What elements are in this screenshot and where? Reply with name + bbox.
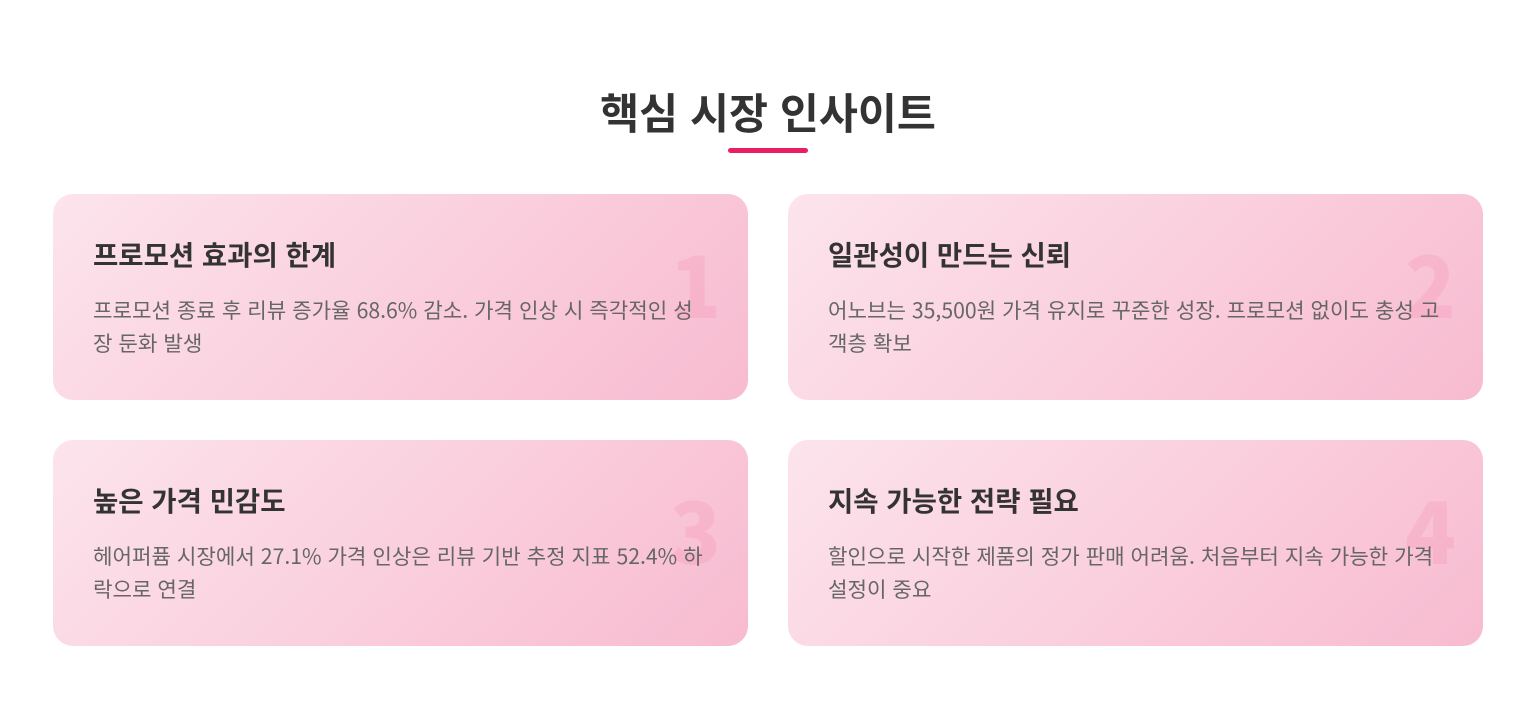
- number 1: 1: [670, 222, 721, 343]
- heading: 지속 가능한 전략 필요: [828, 479, 1079, 519]
- panel: insight 4: [788, 440, 1483, 646]
- number 4: 4: [1405, 468, 1456, 589]
- text block: 할인으로 시작한 제품의 정가 판매 어려움. 처음부터 지속 가능한 가격 설정이 중요: [828, 540, 1433, 604]
- heading: 높은 가격 민감도: [93, 479, 286, 519]
- number 2: 2: [1405, 222, 1456, 343]
- panel: insight 3: [53, 440, 748, 646]
- title underline: [728, 148, 808, 153]
- title: 핵심 시장 인사이트: [600, 81, 936, 142]
- panel: insight 2: [788, 194, 1483, 400]
- text block: 헤어퍼퓸 시장에서 27.1% 가격 인상은 리뷰 기반 추정 지표 52.4% 하락으로 연결: [93, 540, 703, 604]
- text block: 프로모션 종료 후 리뷰 증가율 68.6% 감소. 가격 인상 시 즉각적인 성장 둔화 발생: [93, 294, 693, 358]
- number 3: 3: [670, 468, 721, 589]
- heading: 프로모션 효과의 한계: [93, 233, 336, 273]
- text block: 어노브는 35,500원 가격 유지로 꾸준한 성장. 프로모션 없이도 충성 고객층 확보: [828, 294, 1439, 358]
- panel: insight 1: [53, 194, 748, 400]
- heading: 일관성이 만드는 신뢰: [828, 233, 1071, 273]
